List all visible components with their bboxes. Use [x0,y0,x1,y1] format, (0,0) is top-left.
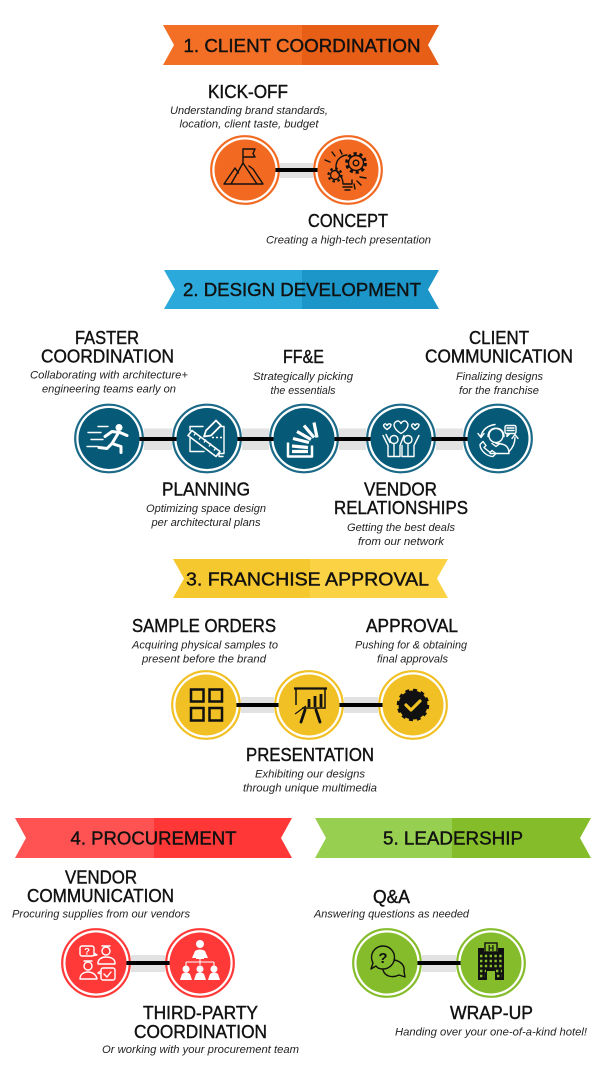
text: Presentation: PRESENTATION [246,745,374,765]
text: Q&A: Q&A [373,887,410,907]
text: Third-party Coordination: COORDINATION [134,1022,267,1042]
text: Faster Coordination: engineering teams early on [42,384,176,396]
text: FF&E: Strategically picking [253,371,354,383]
text: Approval: APPROVAL [366,616,458,636]
text: FF&E: the essentials [270,385,336,397]
text: Faster Coordination [30,328,189,396]
text: Vendor Relationships: Getting the best deals [347,522,456,534]
banner: 4. Procurement [15,818,292,858]
text: Sample Orders: Acquiring physical samples to [131,640,278,652]
text: Client Communication: CLIENT [469,328,529,348]
text: Third-party Coordination: THIRD-PARTY [143,1003,258,1023]
text: Client Communication [425,328,573,397]
text: Approval: Pushing for & obtaining [355,640,468,652]
text: Presentation: Exhibiting our designs [255,768,366,780]
text: Concept: CONCEPT [308,211,388,231]
text: Vendor Communication [12,868,190,920]
icon: question speech bubbles [353,929,421,997]
icon: chatting people: ? [84,946,90,958]
icon: mountain with flag [211,136,279,204]
text: Q&A: Answering questions as needed [313,908,470,920]
icon: stacked items [270,405,338,472]
banner: 2. Design Development: 2. DESIGN DEVELOPMENT [183,279,421,300]
text: Sample Orders: present before the brand [141,654,267,666]
text: Kick-off: location, client taste, budget [180,118,319,130]
text: Client Communication: for the franchise [459,385,539,397]
text: Approval: final approvals [377,654,448,666]
icon: check badge [379,671,447,739]
text: FF&E [253,347,354,397]
text: Sample Orders [131,616,278,666]
connector: procurement [126,955,170,972]
text: Wrap-up [395,1003,587,1038]
text: Concept [266,211,431,246]
text: Presentation: through unique multimedia [243,782,377,794]
banner: 5. Leadership: 5. LEADERSHIP [383,828,523,848]
text: Kick-off: Understanding brand standards, [170,105,328,117]
text: Planning [146,480,266,529]
text: Vendor Communication: VENDOR [65,868,137,888]
text: Vendor Relationships [334,480,468,548]
text: Kick-off: KICK-OFF [208,82,288,102]
text: Planning: per architectural plans [150,517,261,529]
text: Planning: Optimizing space design [146,503,266,515]
banner: 3. Franchise Approval: 3. FRANCHISE APPROVAL [186,568,429,590]
connector: leadership [418,955,460,972]
banner: 5. Leadership [315,818,591,858]
text: Kick-off [170,82,328,130]
icon: four-square grid [172,671,240,739]
banner: 1. Client Coordination [163,25,439,65]
text: Approval [355,616,468,666]
icon: light bulb with gears [314,136,382,204]
icon: hotel building: H [488,943,494,953]
text: Presentation [243,745,377,794]
text: Vendor Relationships: VENDOR [364,480,437,500]
icon: question speech bubbles: ? [378,950,388,967]
banner: 3. Franchise Approval [173,559,448,598]
text: Client Communication: Finalizing designs [456,371,543,383]
icon: presentation board [275,671,343,739]
banner: 2. Design Development [164,270,439,309]
connector: client coordination [276,163,318,178]
text: Planning: PLANNING [162,480,250,500]
text: Client Communication: COMMUNICATION [425,346,573,366]
banner: 1. Client Coordination: 1. CLIENT COORDINATION [184,35,420,56]
icon: hearts and two people [367,405,435,472]
text: Vendor Relationships: RELATIONSHIPS [334,498,468,518]
banner: 4. Procurement: 4. PROCUREMENT [70,828,236,848]
text: Wrap-up: Handing over your one-of-a-kind hotel! [395,1026,587,1038]
text: Sample Orders: SAMPLE ORDERS [132,616,276,636]
connector: franchise approval [236,697,382,713]
icon: pencil and ruler plan [173,405,241,472]
icon: chatting people [62,929,130,997]
text: Faster Coordination: COORDINATION [41,346,174,366]
text: Concept: Creating a high-tech presentation [266,234,431,246]
text: FF&E: FF&E [283,347,324,367]
text: Vendor Relationships: from our network [358,536,445,548]
text: Faster Coordination: FASTER [75,328,139,348]
icon: hotel building [457,929,525,997]
text: Faster Coordination: Collaborating with architecture+ [30,370,189,382]
text: Vendor Communication: Procuring supplies from our vendors [12,908,190,920]
icon: agent with phone and chat bubble [464,405,532,472]
connector: design development [140,428,468,450]
text: Q&A [313,887,470,920]
icon: organisation chart [166,929,234,997]
icon: running figure [75,405,143,472]
text: Third-party Coordination: Or working with your procurement team [102,1044,299,1056]
text: Vendor Communication: COMMUNICATION [27,886,174,906]
text: Third-party Coordination [102,1003,299,1056]
text: Wrap-up: WRAP-UP [450,1003,533,1023]
